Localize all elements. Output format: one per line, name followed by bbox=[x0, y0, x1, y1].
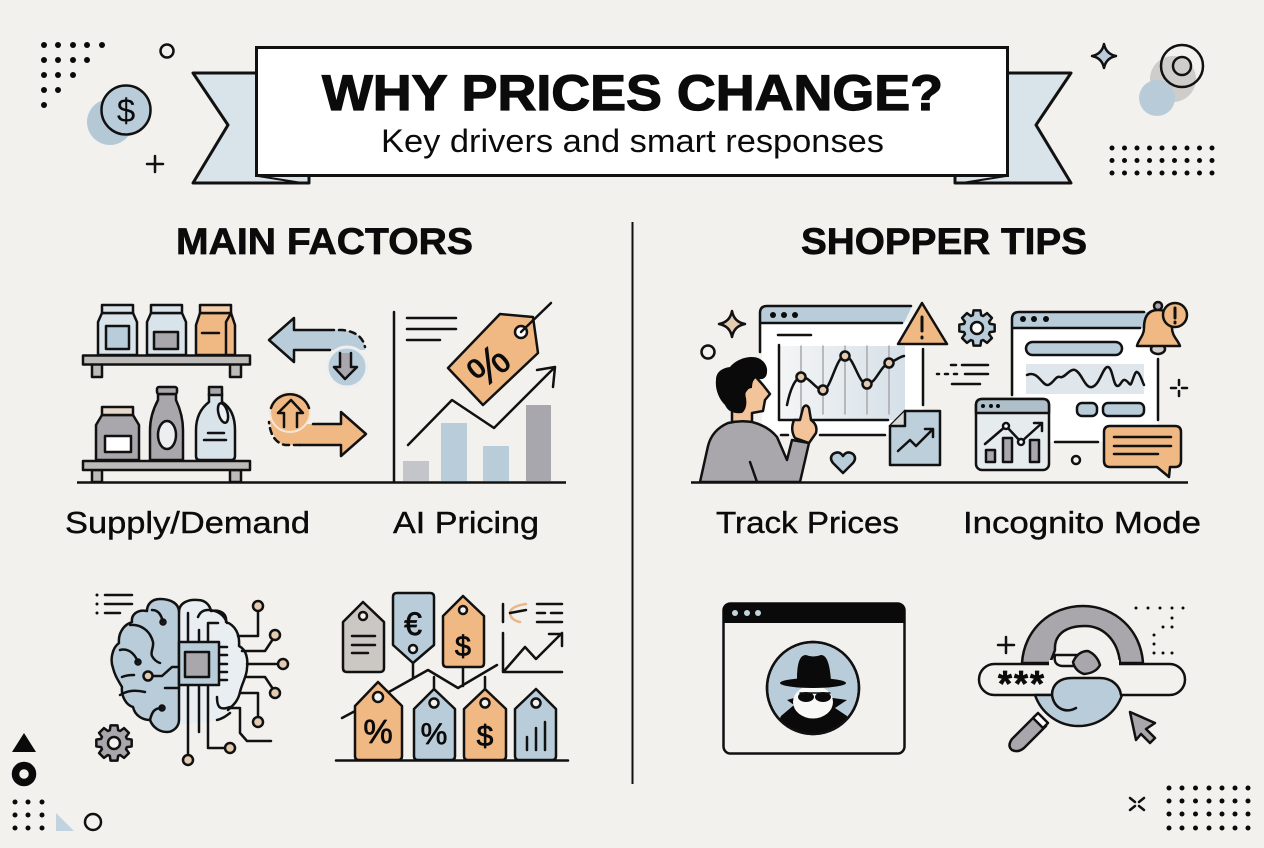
icon: bell alert bbox=[1137, 302, 1187, 354]
gear hole bbox=[971, 322, 983, 334]
tag: percent orange: % bbox=[363, 713, 393, 750]
speed lines bbox=[937, 365, 988, 384]
browser window with chart bbox=[760, 306, 923, 435]
icon: heart bbox=[831, 452, 855, 473]
ribbon folds bbox=[258, 176, 1006, 183]
illustration: private search bbox=[979, 606, 1185, 751]
subtitle: Key drivers and smart responses bbox=[381, 123, 884, 159]
incognito avatar bbox=[767, 642, 860, 740]
tag: bars bbox=[515, 689, 556, 760]
baseline: shopper tips top row bbox=[691, 481, 1188, 484]
list lines bbox=[96, 594, 132, 614]
connector trend line bbox=[342, 663, 497, 718]
icon: price tag: % bbox=[458, 335, 520, 397]
banner panel bbox=[256, 48, 1008, 176]
central divider bbox=[632, 222, 634, 784]
illustration: incognito browser bbox=[723, 603, 905, 754]
lower shelf bbox=[83, 461, 250, 482]
decoration marks bbox=[1072, 380, 1187, 464]
icon: gear bbox=[959, 310, 995, 346]
window header bbox=[723, 603, 905, 623]
label: incognito mode: Incognito Mode bbox=[963, 505, 1201, 540]
arrow: demand right bbox=[269, 392, 366, 456]
tag: dollar bbox=[443, 596, 484, 667]
tag: dollar lower: $ bbox=[477, 720, 494, 753]
illustration: ai pricing bbox=[394, 303, 555, 482]
tag: dollar: $ bbox=[455, 631, 471, 663]
eye shape bbox=[1055, 651, 1100, 674]
icon: warning triangle bbox=[898, 303, 947, 344]
arrow: supply left bbox=[269, 318, 367, 387]
ribbon: left bbox=[193, 73, 309, 183]
label: track prices: Track Prices bbox=[716, 505, 899, 540]
icon: gear bbox=[96, 725, 132, 761]
axis bbox=[393, 312, 395, 482]
tag: dollar lower bbox=[464, 689, 506, 760]
illustration: price tags bbox=[336, 593, 568, 760]
illustration: ai brain chip bbox=[96, 594, 288, 765]
grey arch bbox=[1022, 606, 1143, 663]
top shelf bbox=[83, 356, 250, 377]
cursor bbox=[1130, 712, 1155, 743]
person pointing bbox=[700, 357, 816, 482]
trend arrow bbox=[408, 367, 555, 445]
decoration: bottom right bbox=[1130, 786, 1250, 830]
small trend chart bbox=[503, 604, 562, 672]
title: WHY PRICES CHANGE? bbox=[322, 65, 943, 121]
illustration: track prices bbox=[700, 302, 1187, 482]
processor chip bbox=[179, 642, 227, 685]
tag: percent blue: % bbox=[421, 718, 447, 751]
illustration: supply and demand bbox=[83, 305, 367, 482]
brain left half bbox=[112, 599, 179, 732]
label: supply/demand: Supply/Demand bbox=[65, 505, 310, 540]
tag: percent blue bbox=[414, 689, 455, 760]
label: ai pricing: AI Pricing bbox=[393, 505, 539, 540]
decoration: bottom left bbox=[12, 733, 101, 831]
circuit traces bbox=[144, 601, 288, 765]
masked password: *** bbox=[998, 663, 1044, 704]
plus mark bbox=[998, 637, 1014, 653]
baseline: main factors top row bbox=[77, 481, 566, 484]
legend lines bbox=[407, 318, 456, 340]
magnifying glass bbox=[1010, 678, 1122, 751]
decoration: top right bbox=[1092, 44, 1214, 176]
icon: dollar coin: $ bbox=[117, 92, 135, 129]
bar gap bbox=[1049, 660, 1119, 668]
bar chart bbox=[403, 405, 551, 481]
decoration: top left bbox=[41, 42, 174, 172]
window dots bbox=[732, 610, 761, 616]
brain right half bbox=[179, 600, 247, 725]
browser window with sparkline bbox=[1012, 312, 1158, 442]
speech bubble bbox=[1104, 426, 1181, 477]
tag: euro bbox=[393, 593, 434, 663]
icon: chart document bbox=[890, 411, 940, 465]
window bbox=[724, 604, 904, 754]
ribbon: right bbox=[955, 73, 1071, 183]
icon: dollar coin bbox=[87, 86, 150, 145]
heading: shopper tips: SHOPPER TIPS bbox=[801, 221, 1087, 262]
icon: price tag bbox=[448, 303, 551, 405]
decoration sparkle and circle bbox=[702, 311, 745, 358]
small dashboard window bbox=[976, 399, 1049, 470]
tag: euro: € bbox=[404, 606, 422, 642]
password bar bbox=[979, 664, 1185, 695]
tag: percent orange bbox=[355, 682, 402, 760]
heading: main factors: MAIN FACTORS bbox=[176, 221, 473, 262]
dotted decoration bbox=[1134, 606, 1184, 654]
containers on lower shelf bbox=[96, 387, 235, 460]
jars on top shelf bbox=[98, 305, 235, 355]
tag: grey note bbox=[343, 602, 384, 672]
baseline bbox=[336, 759, 568, 762]
banner bbox=[193, 48, 1071, 183]
